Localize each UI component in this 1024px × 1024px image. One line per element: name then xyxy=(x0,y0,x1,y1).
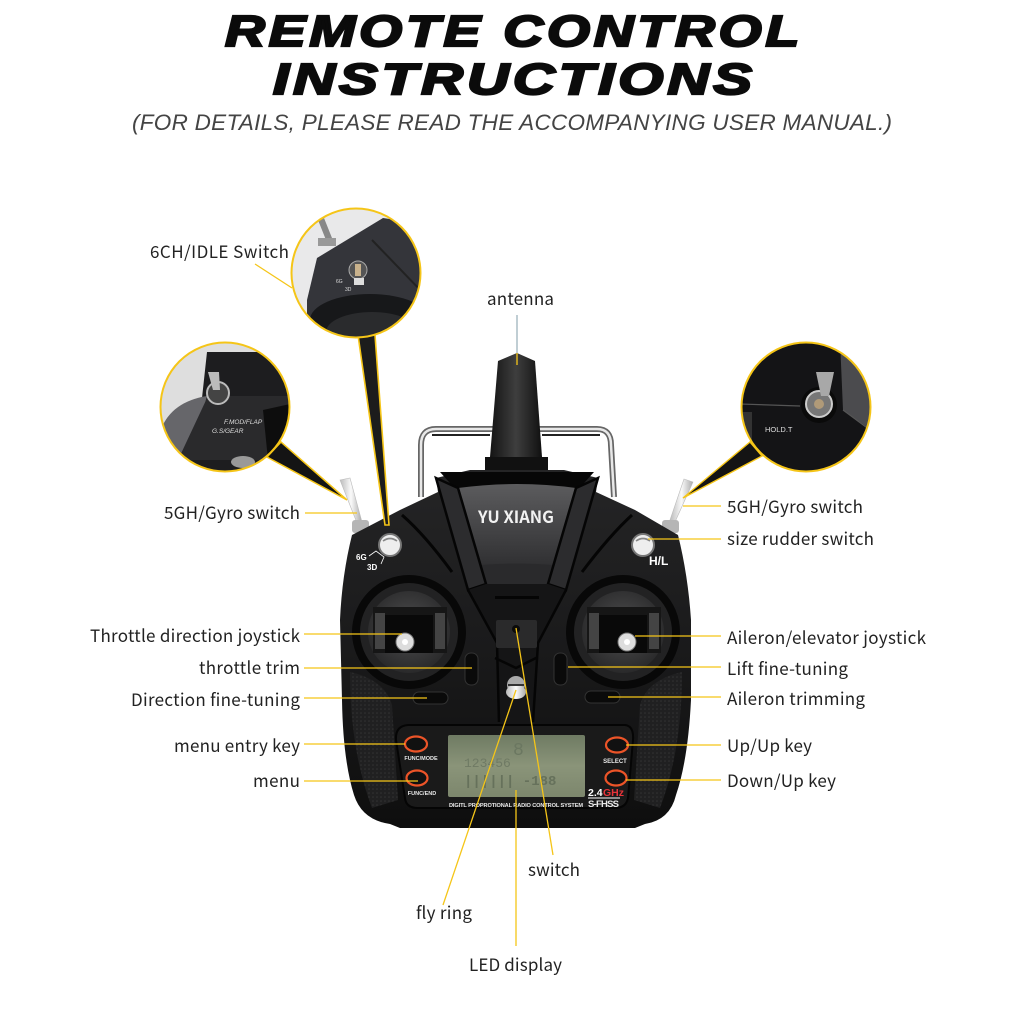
centre switch xyxy=(506,676,526,699)
callout: left 5GH/Gyro switch xyxy=(160,342,347,500)
shield lower band xyxy=(481,564,553,584)
panel labels xyxy=(404,756,627,810)
right joystick xyxy=(566,575,680,689)
labels: LED display xyxy=(469,951,562,976)
centre shield xyxy=(458,484,576,584)
shoulder lines xyxy=(402,515,632,572)
labels: Lift fine-tuning xyxy=(727,655,848,680)
left joystick xyxy=(352,575,466,689)
rubber grip left xyxy=(350,672,398,808)
callout: right Hold switch: HOLD.T xyxy=(765,425,793,434)
panel labels: FUNC/MODE xyxy=(404,756,438,762)
labels: antenna xyxy=(487,285,554,310)
labels: Up/Up key xyxy=(727,732,812,757)
subtitle: (FOR DETAILS, PLEASE READ THE ACCOMPANYING USER MANUAL.) xyxy=(132,110,892,135)
labels: Direction fine-tuning xyxy=(131,686,300,711)
right toggle switch xyxy=(662,479,693,533)
title: INSTRUCTIONS xyxy=(273,55,756,104)
labels: throttle trim xyxy=(199,654,300,679)
labels: Throttle direction joystick xyxy=(90,622,301,647)
labels: menu entry key xyxy=(174,732,300,757)
callout: left 5GH/Gyro switch: G.S/GEAR xyxy=(212,428,244,435)
callout: 6CH/IDLE switch: 6G xyxy=(336,279,343,285)
labels: 5GH/Gyro switch xyxy=(164,499,300,524)
labels: 5GH/Gyro switch xyxy=(727,493,863,518)
control panel xyxy=(396,725,633,810)
transmitter handle xyxy=(421,429,614,497)
H/L and 6G/3D knobs xyxy=(356,534,668,572)
speaker slot xyxy=(495,596,539,599)
labels: menu xyxy=(253,767,300,792)
title xyxy=(225,7,803,104)
callout: 6CH/IDLE switch xyxy=(291,208,430,525)
H/L and 6G/3D knobs: H/L xyxy=(649,554,668,568)
transmitter body xyxy=(340,470,691,828)
trim sliders xyxy=(413,653,620,704)
panel buttons xyxy=(405,736,628,786)
centre channel xyxy=(468,584,566,722)
LCD screen: 123456 xyxy=(464,756,511,771)
LED recess xyxy=(496,620,537,648)
labels: Aileron trimming xyxy=(727,685,865,710)
LCD screen: |||||| -188 xyxy=(464,774,556,790)
antenna xyxy=(485,353,548,470)
panel labels: FUNC/END xyxy=(408,791,436,797)
brand name: YU XIANG xyxy=(477,504,554,528)
rubber grip right xyxy=(634,672,682,808)
LCD screen xyxy=(448,735,585,797)
top black bezel xyxy=(440,472,594,492)
LCD screen: 8 xyxy=(513,741,524,761)
centre channel lines xyxy=(468,590,566,722)
shield side bands xyxy=(436,478,598,590)
labels: 6CH/IDLE Switch xyxy=(150,238,289,263)
callout: left 5GH/Gyro switch: F.MOD/FLAP xyxy=(224,419,263,426)
labels: Aileron/elevator joystick xyxy=(727,624,927,649)
H/L and 6G/3D knobs: 3D xyxy=(367,563,377,572)
labels: Down/Up key xyxy=(727,767,836,792)
left toggle switch xyxy=(340,478,369,533)
panel labels: DIGITL PROPROTIONAL RADIO CONTROL SYSTEM xyxy=(449,803,583,809)
labels: fly ring xyxy=(416,899,472,924)
labels xyxy=(90,238,927,976)
title: REMOTE CONTROL xyxy=(225,7,803,56)
panel labels: S-FHSS xyxy=(588,799,619,810)
callout: 6CH/IDLE switch: 3D xyxy=(345,287,352,293)
panel labels: 2.4 xyxy=(588,787,603,799)
panel labels: GHz xyxy=(603,787,624,799)
leader lines xyxy=(255,264,721,946)
labels: switch xyxy=(528,856,580,881)
callout: right Hold switch xyxy=(683,340,880,498)
labels: size rudder switch xyxy=(727,525,874,550)
H/L and 6G/3D knobs: 6G xyxy=(356,553,367,562)
panel labels: SELECT xyxy=(603,759,627,765)
